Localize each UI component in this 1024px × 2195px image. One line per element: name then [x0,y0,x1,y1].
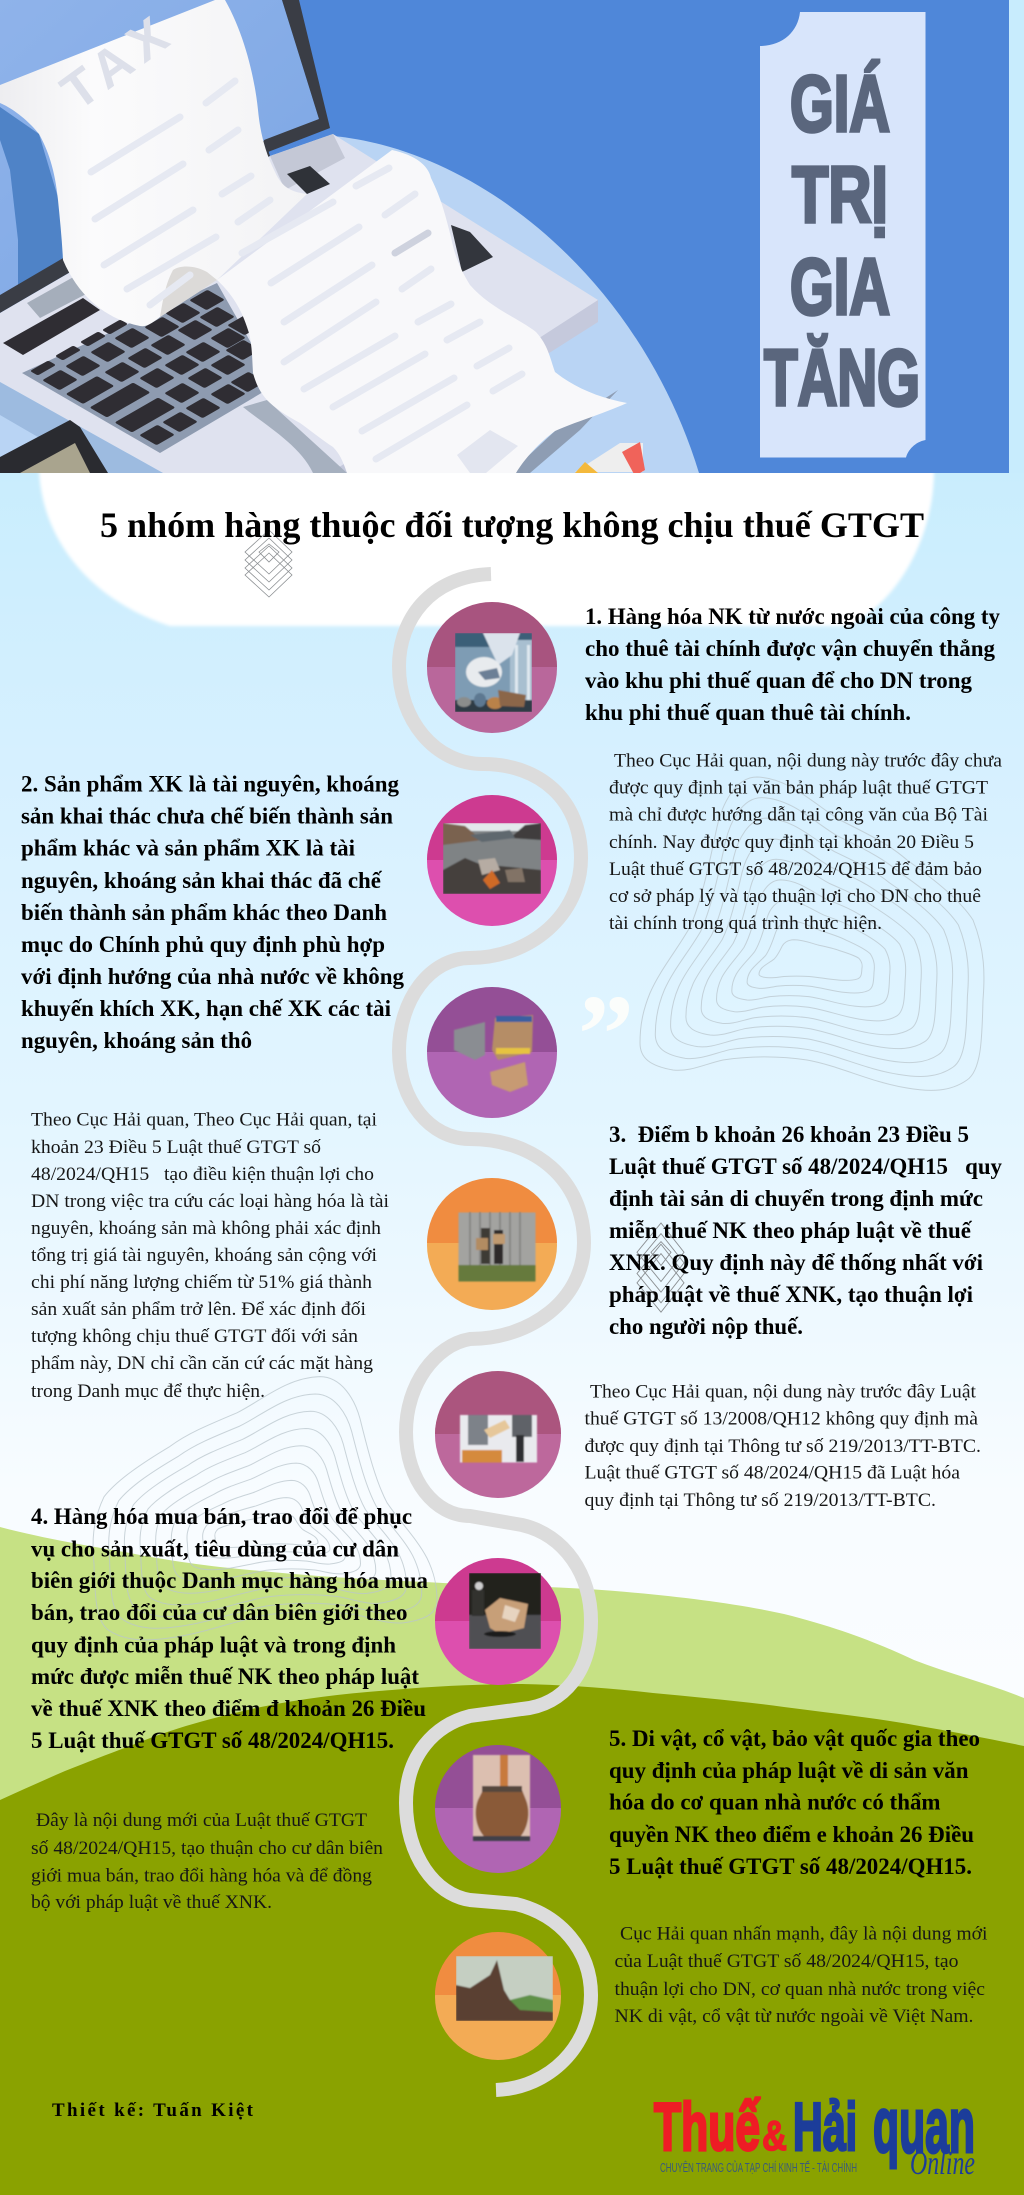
item 4 body: giới mua bán, trao đổi hàng hóa và để đồng [31,1866,372,1886]
item 3 body [584,1382,981,1511]
light green hill [0,1527,1024,2195]
circle 1 with photo [427,602,557,733]
title tag: GIÁ TRỊ GIA TĂNG: GIA [790,242,890,331]
item 1 body: cơ sở pháp lý và tạo thuận lợi cho DN cho thuê [609,886,981,907]
item 5 body: của Luật thuế GTGT số 48/2024/QH15, tạo [614,1951,958,1972]
lower paper sheet [217,150,627,473]
item 1 body [609,750,1002,934]
contour line decoration right [640,777,984,1090]
item 5 heading: 5 Luật thuế GTGT số 48/2024/QH15. [609,1854,972,1879]
item 2 heading: khuyến khích XK, hạn chế XK các tài [21,996,392,1021]
item 1 heading: cho thuê tài chính được vận chuyển thẳng [585,636,995,661]
item 4 heading: mức được miễn thuế NK theo pháp luật [31,1664,419,1689]
circle 3 with photo [427,987,557,1118]
item 3 heading [609,1122,1002,1339]
item 5 body: thuận lợi cho DN, cơ quan nhà nước trong việc [614,1979,985,2000]
item 1 heading: vào khu phi thuế quan để cho DN trong [585,668,972,693]
item 5 heading: 5. Di vật, cổ vật, bảo vật quốc gia theo [609,1726,980,1751]
header illustration: tax document on a laptop [0,0,1009,476]
item 4 heading: vụ cho sản xuất, tiêu dùng của cư dân [31,1536,399,1562]
item 5 heading: hóa do cơ quan nhà nước có thẩm [609,1790,940,1814]
item 4 heading: biên giới thuộc Danh mục hàng hóa mua [31,1568,428,1593]
title tag: GIÁ TRỊ GIA TĂNG: TĂNG [764,333,920,422]
main title: 5 nhóm hàng thuộc đối tượng không chịu thuế GTGT [100,505,924,545]
tablet corner [0,420,108,473]
item 3 heading: pháp luật về thuế XNK, tạo thuận lợi [609,1282,974,1307]
item 5 body [614,1924,988,2027]
item 3 body: được quy định tại Thông tư số 219/2013/TT-BTC. [584,1436,981,1457]
item 3 heading: XNK. Quy định này để thống nhất với [609,1250,984,1275]
item 3 heading: 3. Điểm b khoản 26 khoản 23 Điều 5 [609,1122,969,1147]
item 1 body: mà chỉ được hướng dẫn tại công văn của Bộ Tài [609,804,988,826]
item 2 body: tổng trị giá tài nguyên, khoáng sản cộng với [31,1245,377,1266]
publication logo: CHUYÊN TRANG CỦA TẠP CHÍ KINH TẾ - TÀI CHÍNH [660,2160,857,2175]
dark green hill [0,1684,1024,2195]
item 2 heading: 2. Sản phẩm XK là tài nguyên, khoáng [21,772,399,796]
item 2 body: phẩm này, DN chỉ cần căn cứ các mặt hàng [31,1353,373,1374]
paper curl shadow [160,266,217,317]
title tag: GIÁ TRỊ GIA TĂNG: GIÁ [790,59,890,148]
publication logo: Hải [793,2089,857,2165]
item 3 heading: miễn thuế NK theo pháp luật về thuế [609,1218,973,1243]
item 4 heading: bán, trao đổi của cư dân biên giới theo [31,1600,408,1625]
item 3 heading: Luật thuế GTGT số 48/2024/QH15 quy [609,1154,1002,1179]
item 2 body: sản xuất sản phẩm trở lên. Để xác định đối [31,1299,366,1320]
pencil [575,442,645,476]
publication logo: Online [910,2145,975,2182]
item 1 body: Luật thuế GTGT số 48/2024/QH15 để đảm bảo [609,859,982,880]
item 3 body: Theo Cục Hải quan, nội dung này trước đây Luật [590,1382,977,1402]
item 4 body [31,1810,384,1913]
item 3 body: thuế GTGT số 13/2008/QH12 không quy định mà [584,1408,978,1430]
light blue circle behind laptop [0,136,699,473]
item 1 heading: 1. Hàng hóa NK từ nước ngoài của công ty [585,604,1000,629]
item 2 heading: biến thành sản phẩm khác theo Danh [21,900,387,925]
item 2 heading: nguyên, khoáng sản thô [21,1028,252,1053]
item 3 body: Luật thuế GTGT số 48/2024/QH15 đã Luật hóa [584,1462,960,1484]
item 2 heading: với định hướng của nhà nước về không [21,964,404,989]
circle 6 with photo [435,1558,561,1685]
item 5 heading: quy định của pháp luật về di sản văn [609,1758,969,1783]
circle 2 with photo [427,795,557,926]
item 5 body: NK di vật, cổ vật từ nước ngoài về Việt Nam. [614,2006,974,2027]
item 4 heading: 4. Hàng hóa mua bán, trao đổi để phục [31,1504,412,1529]
item 2 body: Theo Cục Hải quan, Theo Cục Hải quan, tại [31,1110,377,1130]
white cloud behind title [39,470,934,626]
white quotation mark: ” [578,973,634,1097]
title tag: GIÁ TRỊ GIA TĂNG: TRỊ [792,150,888,239]
publication logo: Thuế [654,2089,760,2165]
circle 7 with photo [435,1745,561,1873]
winding spine connector [399,574,591,2090]
item 4 heading [31,1504,428,1753]
upper paper sheet [0,0,307,326]
item 2 heading: phẩm khác và sản phẩm XK là tài [21,836,356,860]
item 1 body: tài chính trong quá trình thực hiện. [609,913,882,934]
item 2 body: khoản 23 Điều 5 Luật thuế GTGT số [31,1137,321,1158]
contour line decoration left [93,1377,437,1640]
publication logo [654,2081,975,2182]
item 5 body: Cục Hải quan nhấn mạnh, đây là nội dung mới [620,1924,988,1944]
item 2 body: 48/2024/QH15 tạo điều kiện thuận lợi cho [31,1164,374,1185]
item 2 body: trong Danh mục để thực hiện. [31,1381,265,1402]
title tag: GIÁ TRỊ GIA TĂNG [760,12,926,458]
item 1 body: Theo Cục Hải quan, nội dung này trước đây chưa [614,750,1002,772]
item 2 body [31,1110,389,1402]
circle 5 with photo [435,1371,561,1498]
laptop base [0,134,598,473]
paper lines [91,81,522,459]
diamond decoration top [245,530,292,597]
item 1 heading [585,604,1000,725]
item 1 body: được quy định tại văn bản pháp luật thuế GTGT [609,778,989,798]
item 2 heading: mục do Chính phủ quy định phù hợp [21,932,385,957]
designer credit: Thiết kế: Tuấn Kiệt [52,2100,254,2121]
item 2 heading [21,772,404,1053]
item 3 heading: cho người nộp thuế. [609,1314,803,1339]
item 2 heading: sản khai thác chưa chế biến thành sản [21,804,393,828]
circle 8 with photo [435,1932,561,2060]
item 3 heading: định tài sản di chuyển trong định mức [609,1186,983,1211]
item 4 heading: 5 Luật thuế GTGT số 48/2024/QH15. [31,1728,394,1753]
diamond decoration middle [637,1223,684,1312]
item 5 heading [609,1726,980,1879]
publication logo: & [762,2112,787,2159]
item 2 body: chi phí năng lượng chiếm từ 51% giá thành [31,1272,373,1293]
item 1 body: chính. Nay được quy định tại khoản 20 Điều 5 [609,832,974,853]
item 4 heading: về thuế XNK theo điểm đ khoản 26 Điều [31,1696,426,1721]
TAX label on paper: TAX [51,2,185,122]
item 4 body: bộ với pháp luật về thuế XNK. [31,1892,272,1913]
item 5 heading: quyền NK theo điểm e khoản 26 Điều [609,1822,974,1847]
item 1 heading: khu phi thuế quan thuê tài chính. [585,700,911,725]
sky background [0,473,1024,2195]
item 4 body: số 48/2024/QH15, tạo thuận cho cư dân biên [31,1838,384,1859]
item 2 body: tượng không chịu thuế GTGT đối với sản [31,1326,359,1347]
keyboard [22,283,275,453]
laptop screen [0,0,319,300]
item 4 heading: quy định của pháp luật và trong định [31,1632,396,1658]
item 3 body: quy định tại Thông tư số 219/2013/TT-BTC. [584,1490,936,1511]
item 2 body: DN trong việc tra cứu các loại hàng hóa là tài [31,1191,389,1212]
circle 4 with photo [427,1178,557,1310]
item 4 body: Đây là nội dung mới của Luật thuế GTGT [36,1810,368,1831]
item 2 heading: nguyên, khoáng sản khai thác đã chế [21,868,383,893]
item 2 body: nguyên, khoáng sản mà không phải xác định [31,1218,382,1239]
